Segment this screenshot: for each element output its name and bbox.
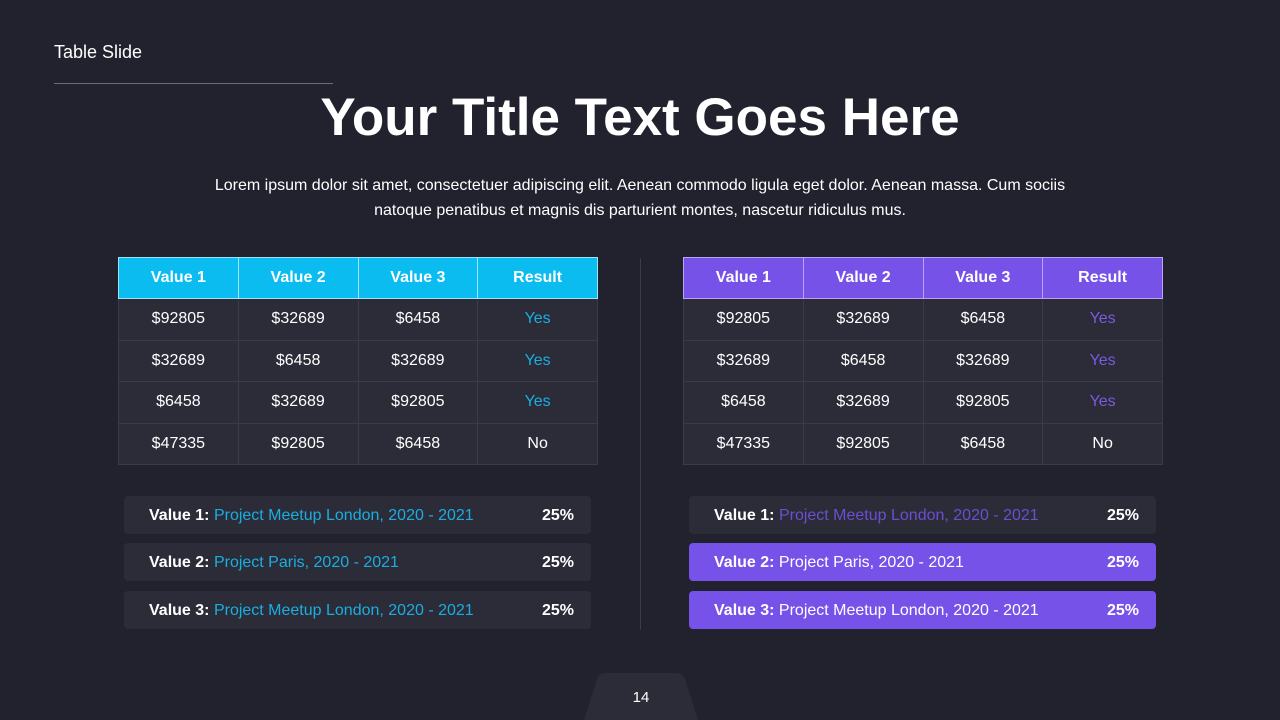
table: purple bbox=[683, 257, 1163, 465]
table: purple: Yes bbox=[1090, 393, 1116, 410]
table: purple: $32689 bbox=[836, 393, 890, 410]
bar: left value 3: 25% bbox=[542, 602, 574, 619]
table: cyan: $6458 bbox=[156, 393, 201, 410]
table: cyan: Value 3 bbox=[390, 269, 445, 286]
table: purple: No bbox=[1092, 435, 1113, 452]
table: cyan bbox=[118, 257, 598, 465]
bars: right bbox=[689, 496, 1156, 629]
bar: left value 2 bbox=[124, 543, 591, 581]
bar: right value 3: Value 3: Project Meetup London, 2020 - 2021 bbox=[714, 602, 1039, 619]
table: cyan: Yes bbox=[525, 393, 551, 410]
bar: left value 2: 25% bbox=[542, 554, 574, 571]
bar: left value 1: 25% bbox=[542, 507, 574, 524]
table: cyan: $6458 bbox=[396, 310, 440, 327]
bar: left value 3 bbox=[124, 591, 591, 629]
label: Table Slide: Table Slide bbox=[54, 42, 142, 62]
table: purple: Value 3 bbox=[955, 269, 1010, 286]
table: purple: $32689 bbox=[717, 352, 770, 369]
table: cyan: $92805 bbox=[152, 310, 205, 327]
table: purple: Result bbox=[1078, 269, 1127, 286]
table: purple: $92805 bbox=[717, 310, 770, 327]
table: purple: Yes bbox=[1090, 352, 1116, 369]
table: cyan: $32689 bbox=[271, 310, 325, 327]
page number tab bbox=[584, 673, 698, 720]
title: Your Title Text Goes Here bbox=[320, 88, 960, 147]
subtitle text: Lorem ipsum dolor sit amet, consectetuer adipiscing elit. Aenean commodo ligula eget dolor. Aenean massa. Cum sociis natoque penatibus et magnis dis parturient montes, nascetur ridiculus mus. bbox=[215, 177, 1065, 219]
table: purple: $6458 bbox=[841, 352, 885, 369]
bar: right value 1 bbox=[689, 496, 1156, 534]
bar: right value 2 bbox=[689, 543, 1156, 581]
table: purple: $92805 bbox=[836, 435, 890, 452]
table: cyan: $32689 bbox=[271, 393, 325, 410]
table: purple: $32689 bbox=[956, 352, 1010, 369]
table: purple: Yes bbox=[1090, 310, 1116, 327]
table: purple: $6458 bbox=[961, 435, 1005, 452]
table: cyan: No bbox=[527, 435, 548, 452]
table: purple: $6458 bbox=[721, 393, 766, 410]
table: purple: Value 1 bbox=[716, 269, 771, 286]
bar: right value 2: 25% bbox=[1107, 554, 1139, 571]
bar: left value 1 bbox=[124, 496, 591, 534]
bar: right value 3 bbox=[689, 591, 1156, 629]
bar: right value 2: Value 2: Project Paris, 2020 - 2021 bbox=[714, 554, 964, 571]
table: purple: $6458 bbox=[961, 310, 1005, 327]
bars: left bbox=[124, 496, 591, 629]
bar: left value 2: Value 2: Project Paris, 2020 - 2021 bbox=[149, 554, 399, 571]
table: cyan: $32689 bbox=[152, 352, 205, 369]
table: purple: Value 2 bbox=[836, 269, 891, 286]
table: cyan: $92805 bbox=[271, 435, 325, 452]
bar: right value 3: 25% bbox=[1107, 602, 1139, 619]
table: cyan: Yes bbox=[525, 352, 551, 369]
table: cyan: $47335 bbox=[152, 435, 205, 452]
table: cyan: Value 1 bbox=[151, 269, 206, 286]
table: cyan: $92805 bbox=[391, 393, 445, 410]
table: purple: $47335 bbox=[717, 435, 770, 452]
table: purple: $32689 bbox=[836, 310, 890, 327]
bar: right value 1: Value 1: Project Meetup London, 2020 - 2021 bbox=[714, 507, 1039, 524]
table: cyan: Result bbox=[513, 269, 562, 286]
table: cyan: Value 2 bbox=[271, 269, 326, 286]
page number tab: 14 bbox=[633, 689, 649, 706]
bar: right value 1: 25% bbox=[1107, 507, 1139, 524]
table: cyan: $6458 bbox=[396, 435, 440, 452]
bar: left value 3: Value 3: Project Meetup London, 2020 - 2021 bbox=[149, 602, 474, 619]
table: cyan: $32689 bbox=[391, 352, 445, 369]
table: cyan: $6458 bbox=[276, 352, 320, 369]
bar: left value 1: Value 1: Project Meetup London, 2020 - 2021 bbox=[149, 507, 474, 524]
table: cyan: Yes bbox=[525, 310, 551, 327]
table: purple: $92805 bbox=[956, 393, 1010, 410]
